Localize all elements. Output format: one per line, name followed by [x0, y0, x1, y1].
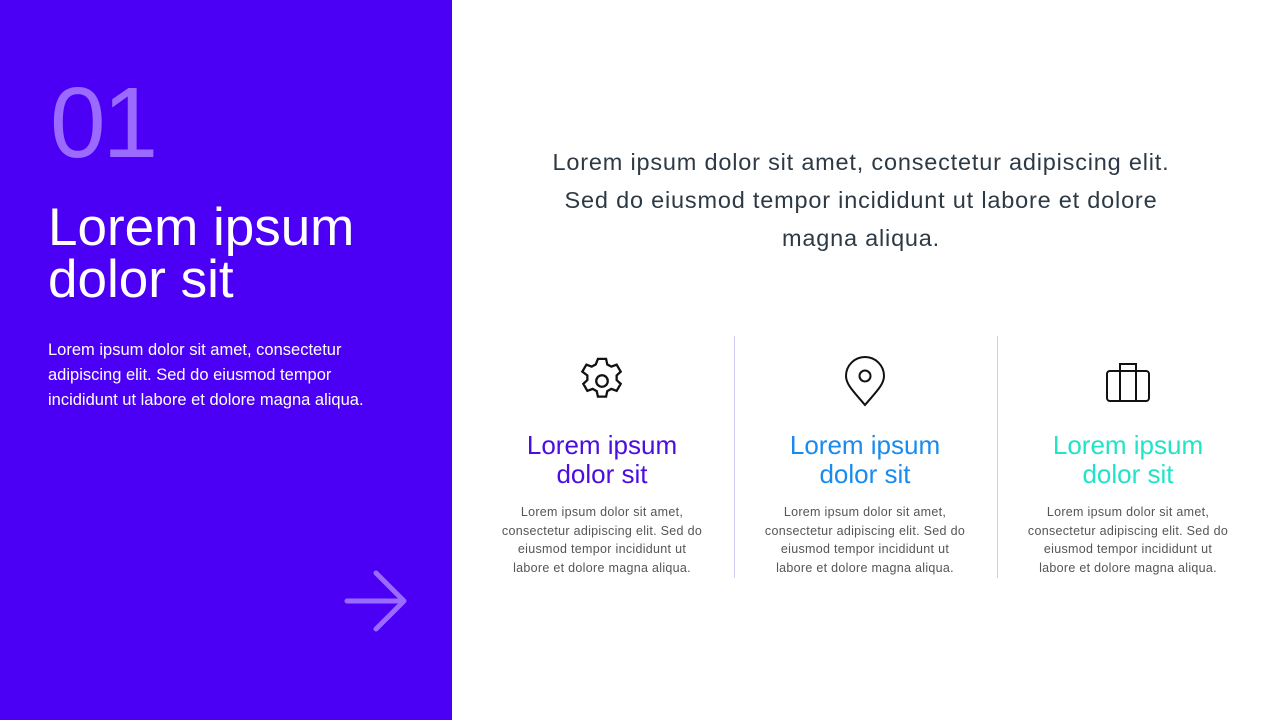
- body text: consectetur adipiscing elit. Sed do: [765, 524, 965, 538]
- title: Lorem ipsum: [48, 198, 354, 257]
- heading: [1053, 430, 1203, 489]
- body text: Lorem ipsum dolor sit amet,: [521, 505, 683, 519]
- left paragraph: Lorem ipsum dolor sit amet, consectetur: [48, 341, 341, 359]
- column 2: [765, 356, 965, 575]
- intro text: magna aliqua.: [782, 225, 940, 251]
- column 1: [502, 358, 702, 575]
- panel: left purple: [0, 0, 452, 720]
- body text: labore et dolore magna aliqua.: [513, 561, 691, 575]
- heading: Lorem ipsum: [790, 430, 940, 460]
- icon: location pin: [845, 356, 885, 406]
- body text: consectetur adipiscing elit. Sed do: [1028, 524, 1228, 538]
- title: [48, 198, 354, 309]
- heading: dolor sit: [1082, 459, 1174, 489]
- icon: suitcase: [1106, 363, 1150, 402]
- heading: dolor sit: [819, 459, 911, 489]
- intro text: [553, 149, 1169, 251]
- body text: Lorem ipsum dolor sit amet,: [1047, 505, 1209, 519]
- column 3: [1028, 363, 1228, 575]
- body text: Lorem ipsum dolor sit amet,: [784, 505, 946, 519]
- intro text: Lorem ipsum dolor sit amet, consectetur adipiscing elit.: [553, 149, 1169, 175]
- body text: eiusmod tempor incididunt ut: [781, 542, 949, 556]
- body text: labore et dolore magna aliqua.: [776, 561, 954, 575]
- number 01: 01: [50, 67, 155, 179]
- body text: [1028, 505, 1228, 575]
- arrow: [344, 570, 406, 632]
- body text: eiusmod tempor incididunt ut: [1044, 542, 1212, 556]
- left paragraph: adipiscing elit. Sed do eiusmod tempor: [48, 366, 331, 384]
- heading: Lorem ipsum: [1053, 430, 1203, 460]
- left paragraph: incididunt ut labore et dolore magna aliqua.: [48, 391, 364, 409]
- heading: Lorem ipsum: [527, 430, 677, 460]
- body text: [502, 505, 702, 575]
- title: dolor sit: [48, 250, 234, 309]
- heading: [527, 430, 677, 489]
- body text: labore et dolore magna aliqua.: [1039, 561, 1217, 575]
- icon: gear: [580, 358, 622, 398]
- heading: dolor sit: [556, 459, 648, 489]
- body text: [765, 505, 965, 575]
- heading: [790, 430, 940, 489]
- intro text: Sed do eiusmod tempor incididunt ut labore et dolore: [565, 187, 1157, 213]
- body text: eiusmod tempor incididunt ut: [518, 542, 686, 556]
- body text: consectetur adipiscing elit. Sed do: [502, 524, 702, 538]
- left paragraph: [48, 341, 364, 409]
